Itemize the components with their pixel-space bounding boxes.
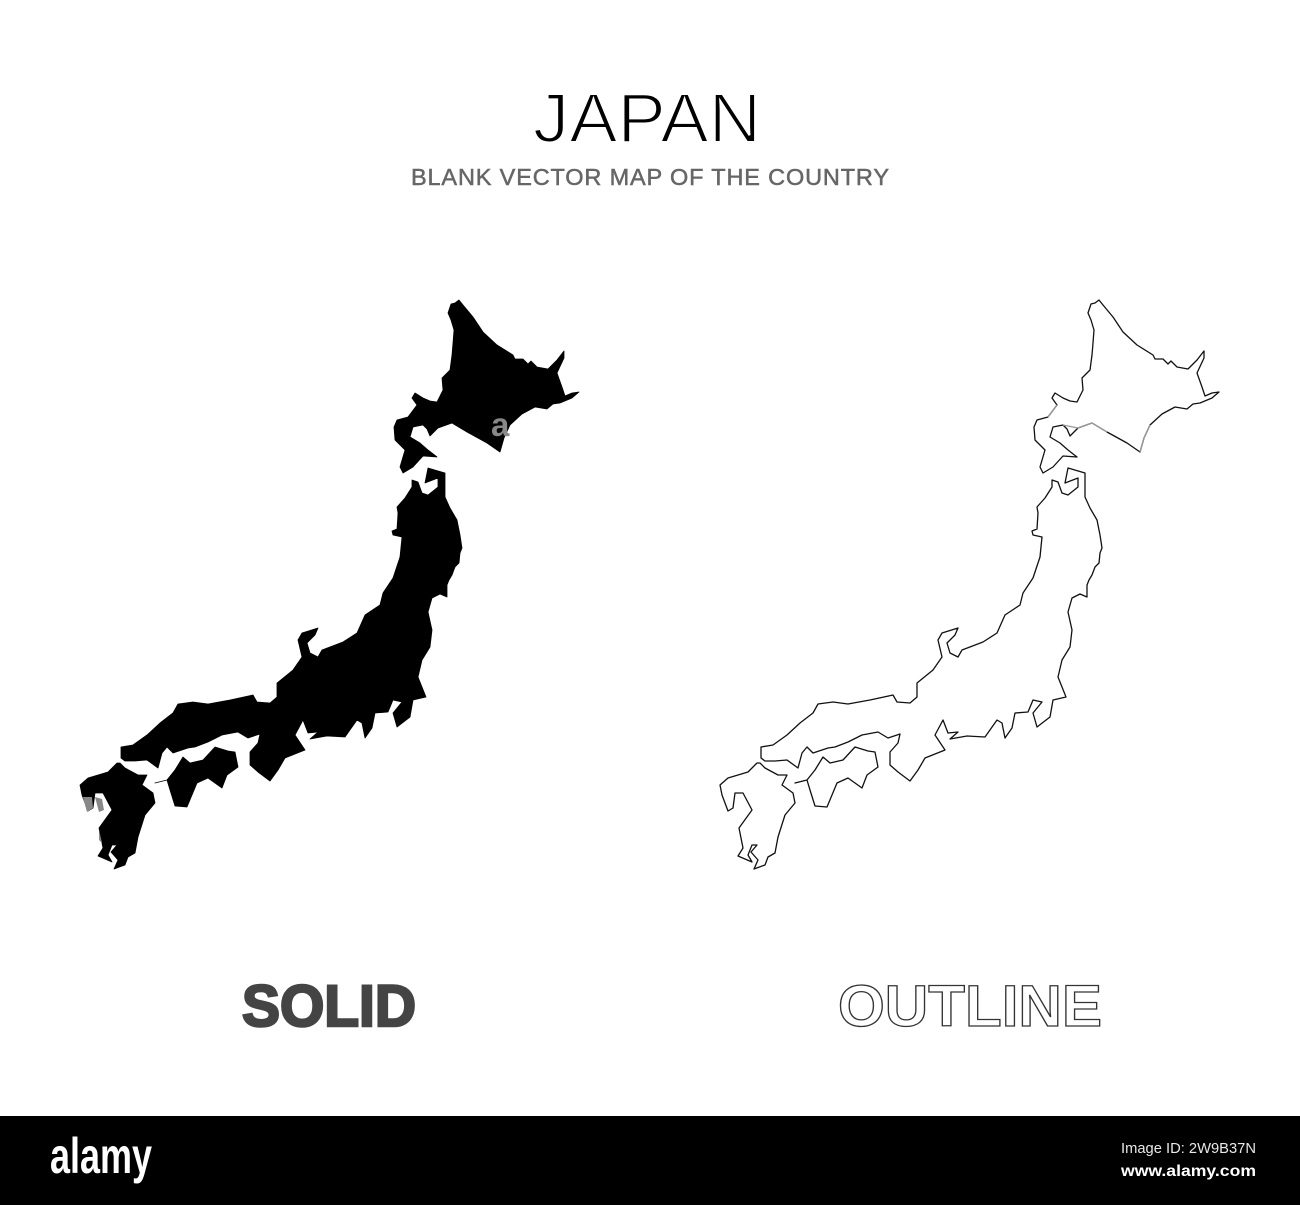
map: outline Japan bbox=[720, 300, 1219, 869]
outline: Shikoku bbox=[795, 747, 878, 807]
watermark fragments on Kyushu bbox=[83, 797, 104, 843]
footer bar bbox=[0, 1116, 1300, 1205]
outline: Hokkaido bbox=[1034, 300, 1219, 473]
subtitle: BLANK VECTOR MAP OF THE COUNTRY bbox=[411, 164, 889, 190]
island: Shikoku bbox=[155, 747, 238, 807]
label: OUTLINE: OUTLINE bbox=[838, 974, 1102, 1039]
watermark letter on Hokkaido: a bbox=[491, 406, 510, 443]
image id: Image ID: 2W9B37N bbox=[1121, 1141, 1256, 1157]
label: SOLID: SOLID bbox=[242, 974, 416, 1039]
outline: Honshu bbox=[761, 468, 1102, 781]
island: Hokkaido bbox=[394, 300, 579, 473]
watermark fade on outline coast bbox=[1048, 405, 1150, 452]
website: www.alamy.com bbox=[1120, 1163, 1256, 1180]
footer logo: alamy bbox=[50, 1128, 152, 1184]
island: Kyushu bbox=[80, 763, 155, 869]
island: Honshu bbox=[121, 468, 462, 781]
outline: Kyushu bbox=[720, 763, 795, 869]
map: solid Japan silhouette bbox=[80, 300, 579, 869]
title: JAPAN bbox=[533, 79, 761, 157]
